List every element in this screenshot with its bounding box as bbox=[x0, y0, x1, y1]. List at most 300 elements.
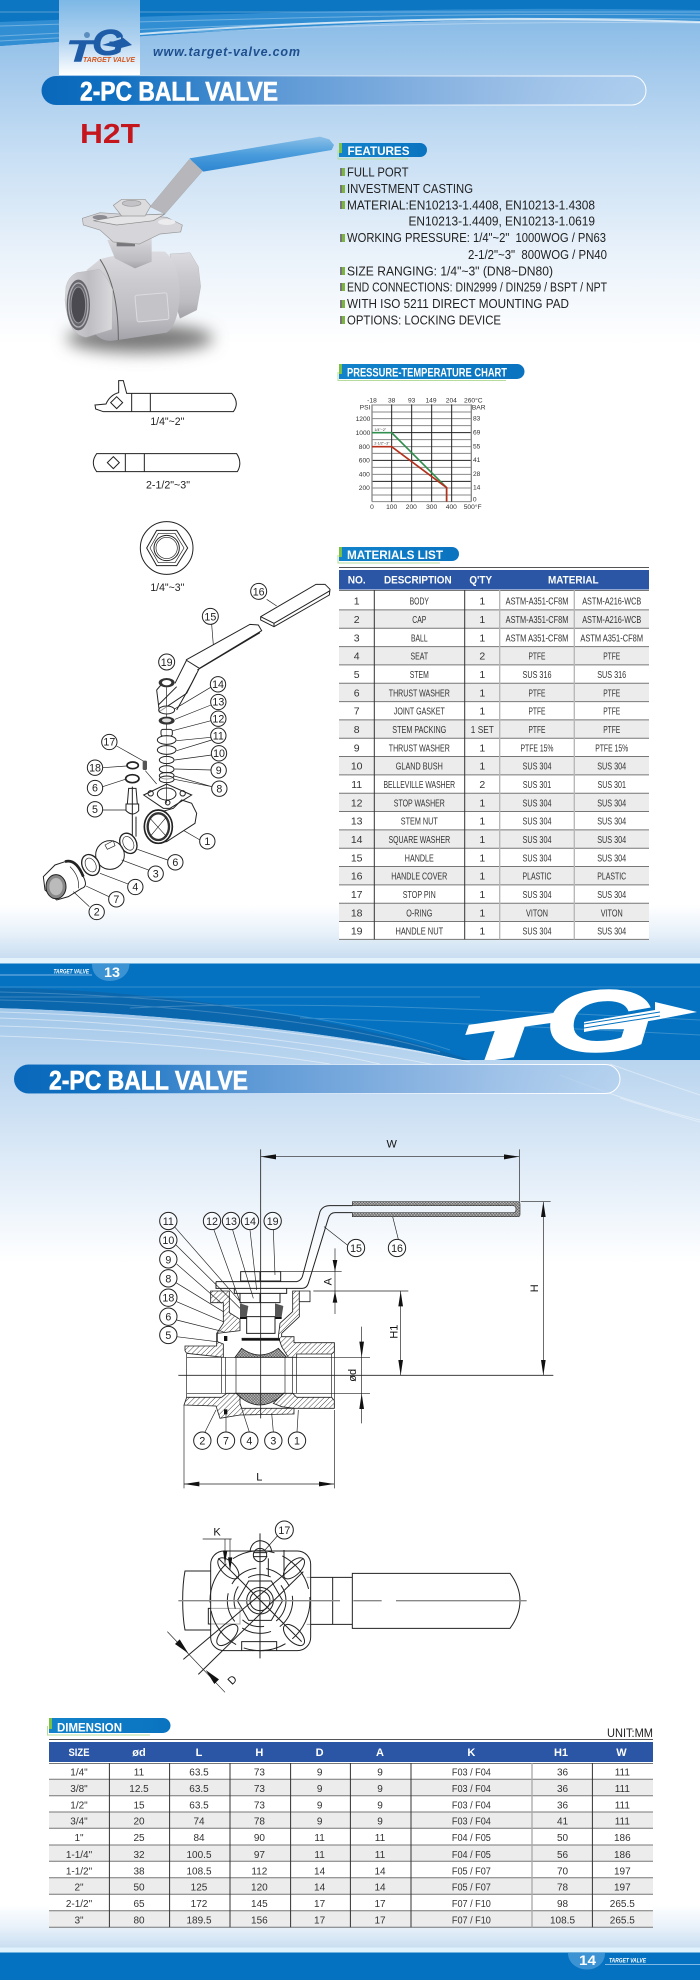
table rows: PTFE bbox=[603, 651, 620, 663]
dimension table header: K bbox=[467, 1747, 475, 1759]
bores and centre lines bbox=[187, 1343, 370, 1408]
table rows: HANDLE bbox=[405, 852, 434, 864]
table rows: SUS 304 bbox=[597, 926, 626, 938]
axis labels: 500°F bbox=[464, 503, 482, 511]
title bar: page 13: 2-PC BALL VALVE bbox=[80, 76, 278, 106]
logo: TG bbox=[66, 22, 136, 68]
table rows: SUS 304 bbox=[597, 797, 626, 809]
exploded: valve parts: 1 bbox=[204, 836, 210, 848]
table rows: PTFE 15% bbox=[520, 742, 554, 754]
dimension table rows: 112 bbox=[251, 1866, 268, 1877]
axis labels: 1200 bbox=[356, 416, 371, 423]
page 13 footer tab: 13 bbox=[104, 964, 120, 980]
dimension table rows: F07 / F10 bbox=[452, 1899, 491, 1910]
table rows: HANDLE COVER bbox=[391, 871, 448, 883]
part balloons: 7 bbox=[223, 1436, 229, 1448]
part balloons: 5 bbox=[165, 1330, 171, 1342]
table rows: 7 bbox=[354, 706, 360, 718]
table rows: PTFE bbox=[603, 687, 620, 699]
dimension table rows: 111 bbox=[615, 1784, 630, 1795]
exploded: valve parts: 8 bbox=[216, 783, 222, 795]
dimension table rows: 125 bbox=[191, 1883, 208, 1894]
handle top view: 1/4 to 2 inch: 1/4"~2" bbox=[150, 416, 184, 428]
curve labels bbox=[374, 428, 390, 446]
axis labels: 0 bbox=[473, 497, 477, 504]
table rows: SUS 304 bbox=[522, 889, 552, 901]
dimension table rows bbox=[66, 1768, 635, 1926]
table rows: 19 bbox=[351, 926, 363, 938]
exploded: valve parts: 3 bbox=[153, 868, 159, 880]
large TG logo: T bbox=[460, 1004, 561, 1073]
dimension table rows: 11 bbox=[375, 1850, 386, 1861]
exploded: valve parts: 7 bbox=[113, 894, 119, 906]
table rows: VITON bbox=[601, 907, 623, 919]
table rows: 17 bbox=[351, 889, 363, 901]
part balloons: 11 bbox=[163, 1216, 174, 1228]
pressure curve 2-1/2 to 3 inch bbox=[372, 447, 447, 502]
stem nut bbox=[113, 199, 151, 216]
table rows: SUS 304 bbox=[522, 816, 552, 828]
dimension table rows: 9 bbox=[377, 1768, 383, 1779]
balloon 17 bbox=[265, 1521, 293, 1550]
dimension table rows: 80 bbox=[133, 1915, 145, 1926]
dimension table rows: F03 / F04 bbox=[452, 1817, 491, 1828]
balloon 17: 17 bbox=[278, 1525, 290, 1537]
table rows: ASTM-A351-CF8M bbox=[506, 596, 568, 608]
dimension table rows: F07 / F10 bbox=[452, 1915, 491, 1926]
table rows: 1 bbox=[479, 596, 485, 608]
part balloons: 3 bbox=[270, 1436, 276, 1448]
dimension table rows: 36 bbox=[557, 1768, 568, 1779]
feature list text: EN10213-1.4409, EN10213-1.0619 bbox=[408, 214, 595, 228]
table rows: 18 bbox=[351, 907, 363, 919]
dimension table rows: 3/4" bbox=[70, 1817, 88, 1828]
blue handle cover bbox=[189, 137, 334, 172]
table rows: STOP PIN bbox=[403, 889, 436, 901]
materials table header: MATERIAL bbox=[548, 574, 599, 586]
table rows: 1 bbox=[479, 632, 485, 644]
table rows: STEM PACKING bbox=[392, 724, 446, 736]
dimension table rows: 73 bbox=[254, 1784, 265, 1795]
feature list text: END CONNECTIONS: DIN2999 / DIN259 / BSPT / NPT bbox=[347, 280, 607, 294]
dimension table rows: 70 bbox=[557, 1866, 568, 1877]
table rows: STOP WASHER bbox=[394, 797, 445, 809]
dimension table rows: 265.5 bbox=[610, 1899, 635, 1910]
pressure-temperature chart bbox=[356, 396, 486, 511]
dimension letters: ød bbox=[347, 1369, 359, 1382]
exploded: valve parts: 2 bbox=[94, 907, 100, 919]
unit note: UNIT:MM bbox=[607, 1726, 653, 1740]
dimension table rows: 84 bbox=[193, 1833, 205, 1844]
table rows: 1 bbox=[479, 687, 485, 699]
dimension K: K bbox=[213, 1526, 221, 1538]
feature list text: SIZE RANGING: 1/4"~3" (DN8~DN80) bbox=[347, 264, 553, 278]
page 14 footer tab: 14 bbox=[579, 1952, 596, 1968]
feature list text: 2-1/2"~3" 800WOG / PN40 bbox=[468, 248, 607, 262]
dimension table rows: 11 bbox=[314, 1833, 325, 1844]
table rows: 15 bbox=[351, 852, 363, 864]
table rows: PLASTIC bbox=[597, 871, 626, 883]
lever plate bbox=[93, 214, 165, 225]
exploded: handle, cover and nut bbox=[159, 583, 330, 710]
axis labels bbox=[356, 396, 486, 511]
table rows: BODY bbox=[410, 596, 429, 608]
curve labels: 1/4"~2" bbox=[374, 428, 387, 432]
pressure-temperature heading bbox=[338, 364, 524, 380]
threaded bore bbox=[67, 280, 90, 330]
part balloons: 4 bbox=[246, 1436, 252, 1448]
axis labels: 200 bbox=[359, 485, 370, 492]
axis labels: 28 bbox=[473, 471, 481, 478]
table rows: 1 bbox=[479, 871, 485, 883]
dimension table rows: 108.5 bbox=[550, 1915, 575, 1926]
pressure curve 1/4 to 2 inch bbox=[372, 433, 447, 502]
page 14 footer tab: TARGET VALVE bbox=[609, 1958, 647, 1964]
lever plate bbox=[157, 673, 197, 712]
table rows: ASTM-A216-WCB bbox=[582, 596, 641, 608]
logo panel bbox=[59, 0, 140, 75]
dimension table header: A bbox=[376, 1747, 384, 1759]
dimension table rows: 14 bbox=[314, 1866, 326, 1877]
dimension heading bbox=[48, 1718, 170, 1735]
dimension table rows: F03 / F04 bbox=[452, 1800, 491, 1811]
table rows: 4 bbox=[354, 651, 360, 663]
dimension letters: H1 bbox=[388, 1325, 400, 1339]
dimension table rows: 9 bbox=[317, 1768, 323, 1779]
table rows: SUS 304 bbox=[597, 834, 626, 846]
dimension table header bbox=[49, 1742, 653, 1762]
dimension table rows: 17 bbox=[374, 1915, 386, 1926]
axis labels: 1000 bbox=[356, 430, 371, 437]
dimension table rows: 11 bbox=[134, 1768, 145, 1779]
seals bbox=[224, 1303, 283, 1414]
table rows: 1 bbox=[479, 614, 485, 626]
dimension table rows: 9 bbox=[377, 1817, 383, 1828]
title bar: page 14: 2-PC BALL VALVE bbox=[49, 1066, 248, 1096]
dimension table rows: F05 / F07 bbox=[452, 1866, 491, 1877]
table rows: 6 bbox=[354, 687, 360, 699]
table rows: PTFE bbox=[528, 706, 546, 718]
part 16 handle cover bbox=[261, 584, 330, 627]
balloon leaders bbox=[175, 1217, 398, 1432]
dimension table rows: 108.5 bbox=[186, 1866, 212, 1877]
feature bullets bbox=[340, 168, 345, 324]
axis labels: 0 bbox=[370, 504, 374, 511]
page 14 footer tab bbox=[568, 1952, 700, 1970]
table rows: 1 bbox=[479, 852, 485, 864]
table rows: THRUST WASHER bbox=[389, 742, 450, 754]
dimension table rows: 20 bbox=[133, 1817, 145, 1828]
dimension table rows: 65 bbox=[133, 1899, 145, 1910]
axis labels: 200 bbox=[406, 504, 417, 511]
axis labels: 300 bbox=[426, 504, 438, 511]
table rows: 1 bbox=[479, 889, 485, 901]
dimension table rows: 120 bbox=[251, 1883, 268, 1894]
dimension table rows: 186 bbox=[614, 1850, 631, 1861]
table rows: SUS 304 bbox=[522, 852, 552, 864]
leader lines bbox=[73, 687, 212, 907]
dimension table header: H bbox=[255, 1747, 263, 1759]
mounting flange bbox=[82, 213, 182, 244]
table rows: 1 bbox=[479, 907, 485, 919]
exploded: handle, cover and nut: 19 bbox=[161, 657, 173, 669]
dimension table rows: 1" bbox=[74, 1833, 84, 1844]
part balloons: 13 bbox=[225, 1216, 237, 1228]
part balloons: 1 bbox=[294, 1436, 300, 1448]
dimension table rows: 15 bbox=[133, 1800, 145, 1811]
dimension table rows: 189.5 bbox=[186, 1915, 212, 1926]
page 13 footer tab bbox=[0, 964, 130, 981]
dimension table rows: 14 bbox=[374, 1866, 386, 1877]
dimension table rows: 14 bbox=[374, 1883, 386, 1894]
part 1 body and flange bbox=[150, 800, 197, 843]
axis labels: -18 bbox=[367, 397, 377, 404]
dimension table rows: F04 / F05 bbox=[452, 1850, 491, 1861]
dimension D: D bbox=[226, 1673, 240, 1687]
feature list text: WITH ISO 5211 DIRECT MOUNTING PAD bbox=[347, 297, 569, 311]
concentric circles bbox=[210, 1551, 310, 1651]
table rows: BELLEVILLE WASHER bbox=[383, 779, 455, 791]
ball section bbox=[235, 1348, 287, 1405]
neck bbox=[107, 237, 152, 268]
axis labels: 14 bbox=[473, 484, 481, 491]
part balloons bbox=[160, 1212, 406, 1449]
materials list heading: MATERIALS LIST bbox=[347, 548, 444, 562]
dimension table rows: 9 bbox=[377, 1800, 383, 1811]
dimension table rows: 265.5 bbox=[610, 1915, 635, 1926]
logo: TG: TARGET VALVE bbox=[83, 55, 136, 64]
axis labels: 204 bbox=[446, 397, 457, 404]
table rows: 9 bbox=[354, 742, 360, 754]
table rows: 1 bbox=[479, 706, 485, 718]
exploded: valve parts: 11 bbox=[213, 730, 224, 742]
body hex end bbox=[183, 1571, 240, 1630]
table rows: SUS 316 bbox=[597, 669, 626, 681]
dimension table rows: 2-1/2" bbox=[66, 1899, 93, 1910]
table rows: 13 bbox=[351, 816, 363, 828]
exploded: valve parts: 4 bbox=[132, 882, 138, 894]
embossed mark bbox=[135, 293, 169, 322]
exploded: valve parts: 6 bbox=[172, 857, 178, 869]
table rows: 12 bbox=[351, 797, 363, 809]
hatched body section bbox=[184, 1291, 334, 1418]
dimension table rows: 17 bbox=[314, 1899, 326, 1910]
dimension table rows: 100.5 bbox=[186, 1850, 212, 1861]
table rows: SUS 301 bbox=[597, 779, 626, 791]
exploded: valve parts bbox=[43, 673, 227, 920]
dimension table rows: 9 bbox=[377, 1784, 383, 1795]
features heading bbox=[338, 143, 427, 159]
pressure-temperature heading: PRESSURE-TEMPERATURE CHART bbox=[347, 368, 507, 380]
dimension table rows: 111 bbox=[615, 1800, 630, 1811]
table rows: CAP bbox=[412, 614, 426, 626]
table rows: HANDLE NUT bbox=[395, 926, 444, 938]
dimension D bbox=[167, 1632, 240, 1692]
table rows: 11 bbox=[351, 779, 362, 791]
dimension table rows: F05 / F07 bbox=[452, 1883, 491, 1894]
model number: H2T bbox=[80, 118, 140, 149]
table rows: SUS 304 bbox=[597, 761, 626, 773]
dimension table rows: 9 bbox=[317, 1800, 323, 1811]
stem, nut, plates and handle bbox=[216, 1206, 352, 1338]
dimension table rows: 111 bbox=[615, 1768, 630, 1779]
axis labels: 149 bbox=[425, 397, 437, 404]
dimension letters bbox=[256, 1138, 541, 1484]
curve labels: 2-1/2"~3" bbox=[374, 442, 390, 446]
dimension table rows: 97 bbox=[254, 1850, 265, 1861]
part balloons: 6 bbox=[165, 1312, 171, 1324]
table rows: PTFE bbox=[528, 724, 546, 736]
part 5 stem bbox=[126, 787, 139, 840]
logo: TG: G bbox=[92, 22, 124, 63]
part 2 cap and part 7 gasket bbox=[43, 861, 85, 900]
axis labels: 260°C bbox=[464, 396, 483, 404]
table rows: 2 bbox=[479, 651, 485, 663]
part balloons: 8 bbox=[165, 1273, 171, 1285]
dimension table rows: 111 bbox=[615, 1817, 630, 1828]
dimension table rows: 17 bbox=[374, 1899, 386, 1910]
dimension table rows: 63.5 bbox=[189, 1768, 209, 1779]
dimension letters: H bbox=[529, 1284, 541, 1292]
table rows: PTFE bbox=[528, 687, 546, 699]
table rows: 8 bbox=[354, 724, 360, 736]
dimension table rows: 156 bbox=[251, 1915, 268, 1926]
table rows: 14 bbox=[351, 834, 363, 846]
chart grid bbox=[372, 404, 471, 502]
dimension table rows: 50 bbox=[133, 1883, 145, 1894]
dimension table header: H1 bbox=[554, 1747, 568, 1759]
corner slots bbox=[213, 1554, 308, 1649]
feature list text bbox=[347, 166, 607, 328]
table rows: SUS 301 bbox=[523, 779, 551, 791]
table rows: PTFE bbox=[603, 724, 620, 736]
dimension table rows: 145 bbox=[251, 1899, 268, 1910]
table rows: 1 bbox=[479, 797, 485, 809]
dimension letters: L bbox=[256, 1472, 262, 1484]
dimension table header: W bbox=[616, 1747, 627, 1759]
axis labels: 100 bbox=[386, 504, 398, 511]
table rows: PTFE bbox=[603, 706, 620, 718]
dimension table rows: F03 / F04 bbox=[452, 1784, 491, 1795]
part balloons: 16 bbox=[391, 1243, 403, 1255]
handle arm bbox=[150, 159, 204, 214]
table rows: THRUST WASHER bbox=[389, 687, 450, 699]
table rows: 16 bbox=[351, 871, 363, 883]
axis labels: BAR bbox=[472, 405, 486, 412]
handle top view: 1/4 to 2 inch bbox=[95, 381, 236, 428]
dimension table rows: 12.5 bbox=[129, 1784, 149, 1795]
dimension table rows: 14 bbox=[314, 1883, 326, 1894]
part balloons: 2 bbox=[199, 1436, 205, 1448]
dimension table rows: 36 bbox=[557, 1800, 568, 1811]
dimension table rows: 1-1/4" bbox=[66, 1850, 93, 1861]
table rows: ASTM A351-CF8M bbox=[580, 632, 643, 644]
table rows: SUS 304 bbox=[597, 889, 626, 901]
table rows: SUS 304 bbox=[522, 926, 552, 938]
axis labels: 400 bbox=[446, 504, 457, 511]
page 14 background bbox=[0, 964, 700, 1980]
table rows: SEAT bbox=[410, 651, 429, 663]
table rows: PLASTIC bbox=[522, 871, 552, 883]
dimension table rows: 73 bbox=[254, 1768, 265, 1779]
table rows: 1 SET bbox=[471, 724, 494, 736]
axis labels: 83 bbox=[473, 416, 481, 423]
table rows: STEM NUT bbox=[401, 816, 438, 828]
body seam bbox=[100, 259, 118, 340]
logo arrow bbox=[584, 1002, 697, 1032]
feature list text: MATERIAL:EN10213-1.4408, EN10213-1.4308 bbox=[347, 198, 595, 212]
table rows: 1 bbox=[479, 761, 485, 773]
materials table header: NO. bbox=[348, 574, 366, 586]
exploded: valve parts: 12 bbox=[212, 713, 224, 725]
dimension table rows: 98 bbox=[557, 1899, 568, 1910]
exploded: valve parts: 18 bbox=[89, 762, 101, 774]
dimension table rows: 56 bbox=[557, 1850, 568, 1861]
large TG logo: G bbox=[545, 973, 653, 1070]
table rows: ASTM-A216-WCB bbox=[582, 614, 641, 626]
table rows: 1 bbox=[479, 742, 485, 754]
stem stack washers bbox=[159, 706, 175, 714]
materials table header: Q'TY bbox=[469, 574, 493, 586]
feature list text: WORKING PRESSURE: 1/4"~2" 1000WOG / PN63 bbox=[347, 231, 606, 245]
table rows: SUS 316 bbox=[522, 669, 552, 681]
handle cover bbox=[352, 1202, 520, 1217]
exploded: valve parts: 14 bbox=[212, 679, 224, 691]
part 6 seat bbox=[116, 830, 140, 857]
part balloons: 18 bbox=[162, 1293, 174, 1305]
axis labels: PSI bbox=[360, 404, 371, 411]
dimension table rows: 78 bbox=[557, 1883, 568, 1894]
dimension table rows: 1-1/2" bbox=[66, 1866, 93, 1877]
axis labels: 55 bbox=[473, 444, 481, 451]
table rows: JOINT GASKET bbox=[394, 706, 445, 718]
feature list text: OPTIONS: LOCKING DEVICE bbox=[347, 314, 501, 328]
title bar: page 13 bbox=[42, 76, 646, 106]
dimension arrows bbox=[184, 1154, 546, 1486]
table rows: SUS 304 bbox=[522, 834, 552, 846]
dimension table rows: 2" bbox=[74, 1883, 84, 1894]
table rows: ASTM A351-CF8M bbox=[506, 632, 568, 644]
table rows: 1 bbox=[354, 596, 360, 608]
part 4 seat bbox=[78, 851, 103, 879]
centre lines bbox=[178, 1599, 527, 1603]
table rows: 10 bbox=[351, 761, 363, 773]
table rows: 1 bbox=[479, 926, 485, 938]
dimension table header: L bbox=[196, 1747, 203, 1759]
materials table header: DESCRIPTION bbox=[384, 574, 452, 586]
table rows: BALL bbox=[411, 632, 428, 644]
dimension table rows: 9 bbox=[317, 1817, 323, 1828]
axis labels: 41 bbox=[473, 457, 481, 464]
dimension table header: D bbox=[316, 1747, 324, 1759]
dimension K bbox=[203, 1526, 232, 1571]
features section bbox=[338, 143, 607, 328]
dimension table rows: 11 bbox=[375, 1833, 386, 1844]
dimension table rows: 73 bbox=[254, 1800, 265, 1811]
dimension table rows: 25 bbox=[133, 1833, 145, 1844]
table rows: ASTM-A351-CF8M bbox=[506, 614, 568, 626]
exploded: valve parts: 9 bbox=[216, 765, 222, 777]
table rows: 1 bbox=[479, 669, 485, 681]
dimension table rows: 1/4" bbox=[70, 1768, 88, 1779]
axis labels: 600 bbox=[359, 458, 370, 465]
dimension table rows: 63.5 bbox=[189, 1784, 209, 1795]
table rows: PTFE 15% bbox=[595, 742, 628, 754]
exploded: handle, cover and nut: 15 bbox=[204, 611, 216, 623]
exploded view bbox=[43, 583, 330, 920]
dimension table rows: 11 bbox=[314, 1850, 325, 1861]
part balloons: 12 bbox=[206, 1216, 218, 1228]
